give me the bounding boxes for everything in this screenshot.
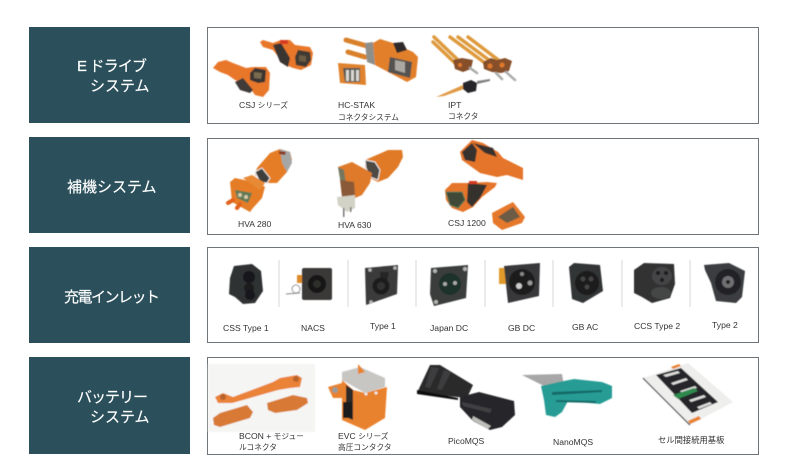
icon: CSJ 1200 [445,140,525,230]
text: charging labels: GB DC [508,323,535,333]
product frame: E-drive [208,28,758,124]
icon: Type 1 inlet [365,265,398,305]
icon: HVA 630 [337,150,403,217]
icon: IPT connector [433,37,515,97]
icon: GB DC inlet [499,263,540,303]
heading box: charging [29,247,190,343]
heading box: E-drive [29,27,190,123]
icon: NACS inlet [286,268,332,300]
product frame: auxiliary [208,138,758,234]
heading box: E-drive: E ドライブ [77,57,147,75]
icon: GB AC inlet [569,263,603,303]
text: HVA 280: HVA 280 [238,219,272,229]
heading box: E-drive: システム [90,78,150,95]
text: charging labels: Japan DC [430,323,468,333]
icon: PicoMQS [417,365,515,430]
text: HC-STAK [338,100,399,122]
heading box: auxiliary: 補機システム [67,179,157,196]
text: CSJ series: CSJ シリーズ [239,100,288,110]
product frame: battery [208,358,758,454]
text: CSJ 1200: CSJ 1200 [448,218,486,228]
text: IPT connector: コネクタ [448,112,478,121]
text: HC-STAK: コネクタシステム [338,113,399,122]
heading box: charging: 充電インレット [64,289,160,306]
icon: Type 2 inlet [704,263,745,303]
icon: cell connection board [643,363,733,425]
icon: CSS Type 1 inlet [229,264,263,304]
icon: BCON + module connector [208,364,315,432]
text: charging labels: Type 1 [370,321,396,331]
product frame: charging [208,248,758,342]
text: cell connection board: セル間接続用基板 [658,435,725,445]
icon: HVA 280 [228,149,292,212]
text: NanoMQS: NanoMQS [553,437,593,447]
text: EVC [338,431,392,452]
text: IPT connector [448,100,478,121]
text: charging labels: CSS Type 1 [223,323,269,333]
icon: EVC series contactor [328,364,387,430]
icon: NanoMQS [522,374,612,417]
text: EVC: EVC シリーズ [338,431,389,441]
heading box: battery: システム [90,409,150,426]
text: charging labels: NACS [301,323,325,333]
text: IPT connector: IPT [448,100,462,110]
text: BCON: ルコネクタ [239,443,277,452]
icon: CCS Type 2 inlet [634,263,675,303]
heading box: battery: バッテリー [77,389,148,406]
text: charging labels: CCS Type 2 [634,321,680,331]
icon: Japan DC inlet [430,265,468,306]
text: charging labels: GB AC [572,322,598,332]
icon: HC-STAK connector system [338,39,418,85]
text: BCON [239,431,304,452]
heading box: battery [29,357,190,454]
text: charging labels: Type 2 [712,320,738,330]
heading box: auxiliary [29,137,190,233]
icon: CSJ series connectors [213,40,313,97]
text: PicoMQS: PicoMQS [448,436,485,446]
text: HC-STAK: HC-STAK [338,100,375,110]
text: BCON: BCON + モジュー [239,431,304,441]
text: charging labels [223,320,738,333]
text: EVC: 高圧コンタクタ [338,442,392,452]
text: HVA 630: HVA 630 [338,220,372,230]
